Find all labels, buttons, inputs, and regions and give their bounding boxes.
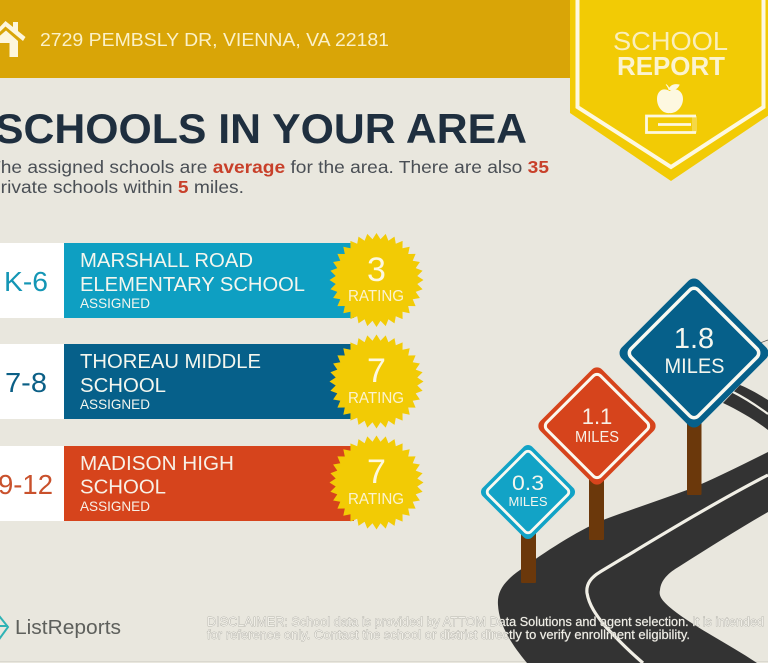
summary text: The assigned schools are average for the area. There are also 35 [0,157,549,177]
icon: logo mark [0,617,8,638]
school name [80,453,234,514]
sign: 1.8 miles: MILES [664,355,724,378]
badge title: SCHOOL [613,26,728,56]
school name [80,351,261,412]
summary text [0,157,549,197]
icon: house [0,21,26,57]
school name: THOREAU MIDDLE [80,351,261,373]
sign: 1.1 miles: MILES [575,429,619,446]
school name: MARSHALL ROAD [80,250,253,272]
school name: ASSIGNED [80,396,150,412]
school name: SCHOOL [80,375,166,397]
rating badge 7: 7 [367,352,386,390]
rating badge 7: RATING [348,390,404,407]
icon: apple on books [646,84,697,132]
grade 7-8: 7-8 [5,367,47,398]
school name: SCHOOL [80,476,166,498]
disclaimer: for reference only. Contact the school or district directly to verify enrollment eligibility. [207,628,690,642]
header banner [0,0,571,78]
ListReports logo: ListReports [15,617,121,639]
sign: 0.3 miles: MILES [508,494,548,509]
school name: ELEMENTARY SCHOOL [80,274,305,296]
rating badge 7 [330,334,424,428]
sign: 0.3 miles: 0.3 [512,472,544,495]
badge title: REPORT [617,51,725,81]
school name [80,250,305,311]
sign: 1.1 miles: 1.1 [582,404,612,429]
school name: ASSIGNED [80,295,150,311]
rating badge 3: 3 [367,251,386,289]
rating badge 3 [330,233,424,327]
winding road [498,340,768,663]
disclaimer [207,615,764,642]
panel: high school row [0,436,424,530]
title: SCHOOLS IN YOUR AREA [0,105,527,152]
rating badge 7: 7 [367,453,386,491]
badge title [613,26,728,81]
sign: 0.3 miles [479,443,577,583]
rating badge 7 [330,436,424,530]
panel: elementary school row [0,233,424,327]
school name: ASSIGNED [80,498,150,514]
panel: middle school row [0,334,424,428]
school report badge [570,0,768,181]
school name: MADISON HIGH [80,453,234,475]
sign: 1.1 miles [535,364,659,540]
rating badge 7: RATING [348,491,404,508]
sign: 1.8 miles: 1.8 [674,323,714,355]
grade K-6: K-6 [4,266,48,297]
disclaimer: DISCLAIMER: School data is provided by ATTOM Data Solutions and agent selection. It is intended [207,615,764,629]
address: 2729 PEMBSLY DR, VIENNA, VA 22181 [40,29,389,50]
rating badge 3: RATING [348,288,404,305]
sign: 1.8 miles [616,275,768,495]
